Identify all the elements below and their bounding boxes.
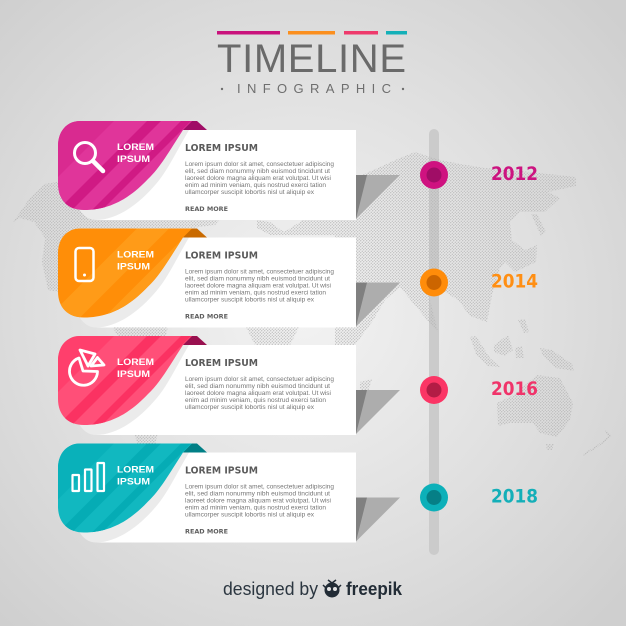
year: 2018: 2018 bbox=[491, 486, 538, 508]
card body text: elit, sed diam nonummy nibh euismod tincidunt ut bbox=[185, 384, 330, 390]
panel: 2018 bbox=[50, 438, 400, 544]
read more: READ MORE bbox=[185, 312, 228, 320]
colored tab bbox=[58, 228, 192, 318]
timeline bar bbox=[429, 129, 439, 555]
tab label: IPSUM bbox=[117, 369, 150, 380]
timeline marker: 2012 bbox=[420, 161, 448, 189]
tab label: LOREM bbox=[117, 250, 154, 260]
paper card bbox=[96, 345, 356, 435]
card body text: Lorem ipsum dolor sit amet, consectetuer adipiscing bbox=[185, 484, 334, 490]
folded corner bbox=[183, 444, 207, 452]
tab label: LOREM bbox=[117, 357, 154, 368]
timeline marker: 2016 bbox=[420, 376, 448, 404]
card shadow bbox=[78, 452, 189, 542]
colored tab bbox=[58, 444, 192, 532]
card shadow bbox=[78, 130, 189, 220]
card body text bbox=[185, 484, 334, 518]
dotted world map bbox=[13, 152, 612, 456]
year: 2016: 2016 bbox=[491, 379, 538, 400]
card body text bbox=[185, 377, 334, 411]
read more: READ MORE bbox=[185, 205, 228, 213]
icon: pie chart bbox=[70, 350, 104, 385]
paper card bbox=[96, 130, 356, 220]
card body text: ullamcorper suscipit lobortis nisl ut aliquip ex bbox=[185, 405, 314, 411]
tab label: IPSUM bbox=[117, 476, 150, 488]
icon: bar chart bbox=[72, 463, 104, 491]
year: 2012: 2012 bbox=[491, 164, 538, 185]
card body text: elit, sed diam nonummy nibh euismod tincidunt ut bbox=[185, 169, 330, 175]
grey fold bbox=[356, 498, 400, 542]
tab label bbox=[117, 250, 154, 272]
card body text: Lorem ipsum dolor sit amet, consectetuer adipiscing bbox=[185, 162, 334, 168]
folded corner bbox=[183, 336, 207, 345]
card body text: elit, sed diam nonummy nibh euismod tincidunt ut bbox=[185, 492, 330, 498]
icon: freepik mascot bbox=[323, 580, 341, 598]
card body text: Lorem ipsum dolor sit amet, consectetuer adipiscing bbox=[185, 377, 334, 383]
subtitle: INFOGRAPHI C bbox=[237, 81, 391, 96]
tab label: LOREM bbox=[117, 464, 154, 476]
credit line bbox=[223, 579, 403, 599]
grey fold bbox=[356, 282, 400, 326]
card shadow bbox=[78, 238, 189, 328]
grey fold bbox=[356, 390, 400, 434]
card body text: ullamcorper suscipit lobortis nisl ut aliquip ex bbox=[185, 190, 314, 196]
credit line: designed by bbox=[223, 579, 318, 599]
card body text: enim ad minim veniam, quis nostrud exerci tation bbox=[185, 506, 326, 512]
card heading: LOREM IPSUM bbox=[185, 143, 258, 154]
paper card bbox=[96, 452, 356, 542]
folded corner bbox=[183, 121, 207, 130]
panel: 2014 bbox=[58, 228, 400, 328]
panel: 2016 bbox=[50, 330, 400, 437]
card body text: elit, sed diam nonummy nibh euismod tincidunt ut bbox=[185, 276, 330, 282]
card body text: enim ad minim veniam, quis nostrud exerci tation bbox=[185, 183, 326, 189]
card heading: LOREM IPSUM bbox=[185, 358, 258, 369]
tab label bbox=[117, 357, 154, 380]
read more: READ MORE bbox=[185, 528, 228, 536]
timeline marker: 2014 bbox=[420, 268, 448, 296]
icon: magnifier bbox=[74, 142, 103, 171]
colored tab bbox=[58, 336, 192, 425]
folded corner bbox=[183, 228, 207, 238]
tab label bbox=[117, 142, 154, 165]
credit line: freepik bbox=[346, 579, 403, 599]
card body text: laoreet dolore magna aliquam erat volutpat. Ut wisi bbox=[185, 284, 331, 290]
card shadow bbox=[78, 345, 189, 435]
title accent bars bbox=[217, 31, 407, 34]
tab label: IPSUM bbox=[117, 154, 150, 165]
card heading: LOREM IPSUM bbox=[185, 466, 258, 476]
card heading: LOREM IPSUM bbox=[185, 250, 258, 262]
paper card bbox=[96, 238, 356, 328]
card body text: enim ad minim veniam, quis nostrud exerci tation bbox=[185, 290, 326, 296]
tab label: LOREM bbox=[117, 142, 154, 153]
colored tab bbox=[58, 121, 192, 210]
card body text: laoreet dolore magna aliquam erat volutpat. Ut wisi bbox=[185, 391, 331, 397]
card body text: laoreet dolore magna aliquam erat volutpat. Ut wisi bbox=[185, 176, 331, 182]
card body text: Lorem ipsum dolor sit amet, consectetuer adipiscing bbox=[185, 270, 334, 276]
year: 2014: 2014 bbox=[491, 272, 538, 292]
card body text: ullamcorper suscipit lobortis nisl ut aliquip ex bbox=[185, 298, 314, 304]
tab label bbox=[117, 464, 154, 488]
card body text bbox=[185, 270, 334, 304]
icon: phone bbox=[76, 248, 94, 281]
card body text: ullamcorper suscipit lobortis nisl ut aliquip ex bbox=[185, 512, 314, 518]
tab label: IPSUM bbox=[117, 262, 150, 272]
card body text: enim ad minim veniam, quis nostrud exerci tation bbox=[185, 398, 326, 404]
timeline marker: 2018 bbox=[420, 484, 448, 512]
card body text: laoreet dolore magna aliquam erat volutpat. Ut wisi bbox=[185, 498, 331, 504]
grey fold bbox=[356, 175, 400, 219]
card body text bbox=[185, 162, 334, 196]
title: TIMELINE bbox=[217, 37, 406, 81]
panel: 2012 bbox=[50, 115, 400, 222]
